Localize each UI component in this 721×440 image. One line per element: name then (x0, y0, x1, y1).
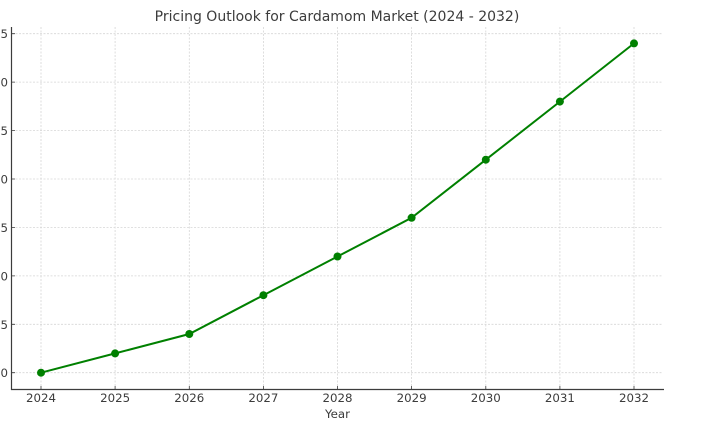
price line series (37, 39, 638, 377)
y axis: 0 (0, 269, 8, 283)
x axis: 2032 (619, 391, 649, 405)
y axis: 0 (0, 76, 8, 90)
x axis: 2026 (174, 391, 204, 405)
x axis (11, 386, 664, 405)
x axis label: Year (324, 407, 350, 421)
y axis: 0 (0, 366, 8, 380)
x axis: 2027 (248, 391, 278, 405)
x axis: 2024 (26, 391, 56, 405)
x axis: 2025 (100, 391, 130, 405)
title: Pricing Outlook for Cardamom Market (2024 - 2032) (155, 9, 519, 25)
y axis: 5 (0, 221, 8, 235)
x axis: 2029 (397, 391, 427, 405)
x axis: 2031 (545, 391, 575, 405)
y axis: 5 (0, 124, 8, 138)
y axis: 0 (0, 172, 8, 186)
y axis: 5 (0, 27, 8, 41)
x axis: 2028 (322, 391, 353, 405)
y axis: 5 (0, 318, 8, 332)
x axis: 2030 (471, 391, 501, 405)
y axis (0, 27, 15, 390)
